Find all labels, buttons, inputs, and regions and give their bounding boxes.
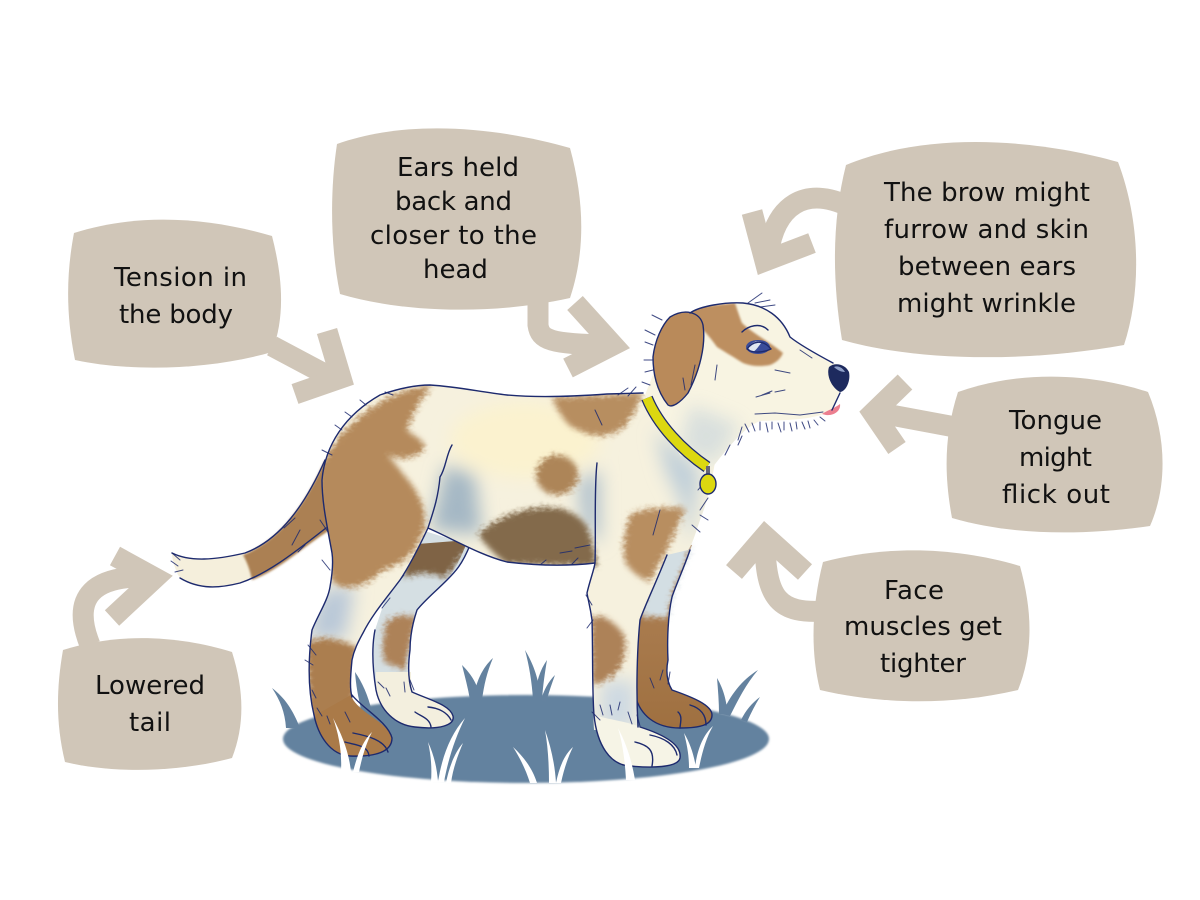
callout: brow furrow: might wrinkle [897,289,1076,319]
callout: tension in the body [68,220,341,394]
callout: tongue flick: flick out [1002,480,1110,510]
beard and whisker fur [642,293,825,455]
dog illustration [171,293,849,767]
callout: face muscles: Face [884,576,944,606]
callout: tongue flick: Tongue [1008,406,1102,436]
white grass blades [333,718,713,783]
callout: face muscles [734,536,1030,701]
callout: lowered tail [58,556,241,770]
nose [828,364,849,392]
arrow: to the mouth [873,382,955,448]
near front foot outline and fur [586,595,680,767]
ear [653,312,704,406]
arrow: to the ears [538,295,613,368]
tail [171,460,330,587]
brown patches [306,385,685,725]
ground shadow [283,695,769,783]
head [642,293,849,468]
callout: brow furrow: furrow and skin [884,215,1089,245]
callout: brow furrow: The brow might [883,178,1090,208]
callout: tongue flick: might [1019,443,1092,473]
callout: brow furrow [752,142,1136,357]
arrow: to the tail [83,556,155,645]
collar [647,398,716,494]
fur colouring [305,385,700,730]
callout: tension in the body: the body [119,300,233,330]
callout: ears held back: head [423,255,488,285]
near front foot [594,715,680,767]
back, rump and chest fur tufts [322,387,708,608]
body outline [309,385,667,727]
near hind foot [305,645,392,756]
arrow: to the brow [752,198,850,261]
callout: tongue flick [873,377,1163,532]
callout: face muscles: muscles get [844,612,1002,642]
eye [742,326,771,354]
body and near legs base [309,385,715,730]
callout: ears held back: Ears held [397,153,519,183]
cream highlights and blue shading [305,402,700,730]
blue grass blades [272,650,760,728]
callout: ears held back: closer to the [370,221,537,251]
arrow: to the face [734,536,825,611]
callout: lowered tail: Lowered [95,671,205,701]
far front leg [635,540,712,728]
callout: brow furrow: between ears [898,252,1076,282]
callout: tension in the body: Tension in [113,263,247,293]
callout: ears held back: back and [395,187,512,217]
callout: lowered tail: tail [129,708,171,738]
far hind leg [373,520,475,728]
tongue [822,404,840,415]
callout: ears held back [332,128,613,368]
arrow: to the back [272,331,341,394]
callout: face muscles: tighter [880,649,966,679]
